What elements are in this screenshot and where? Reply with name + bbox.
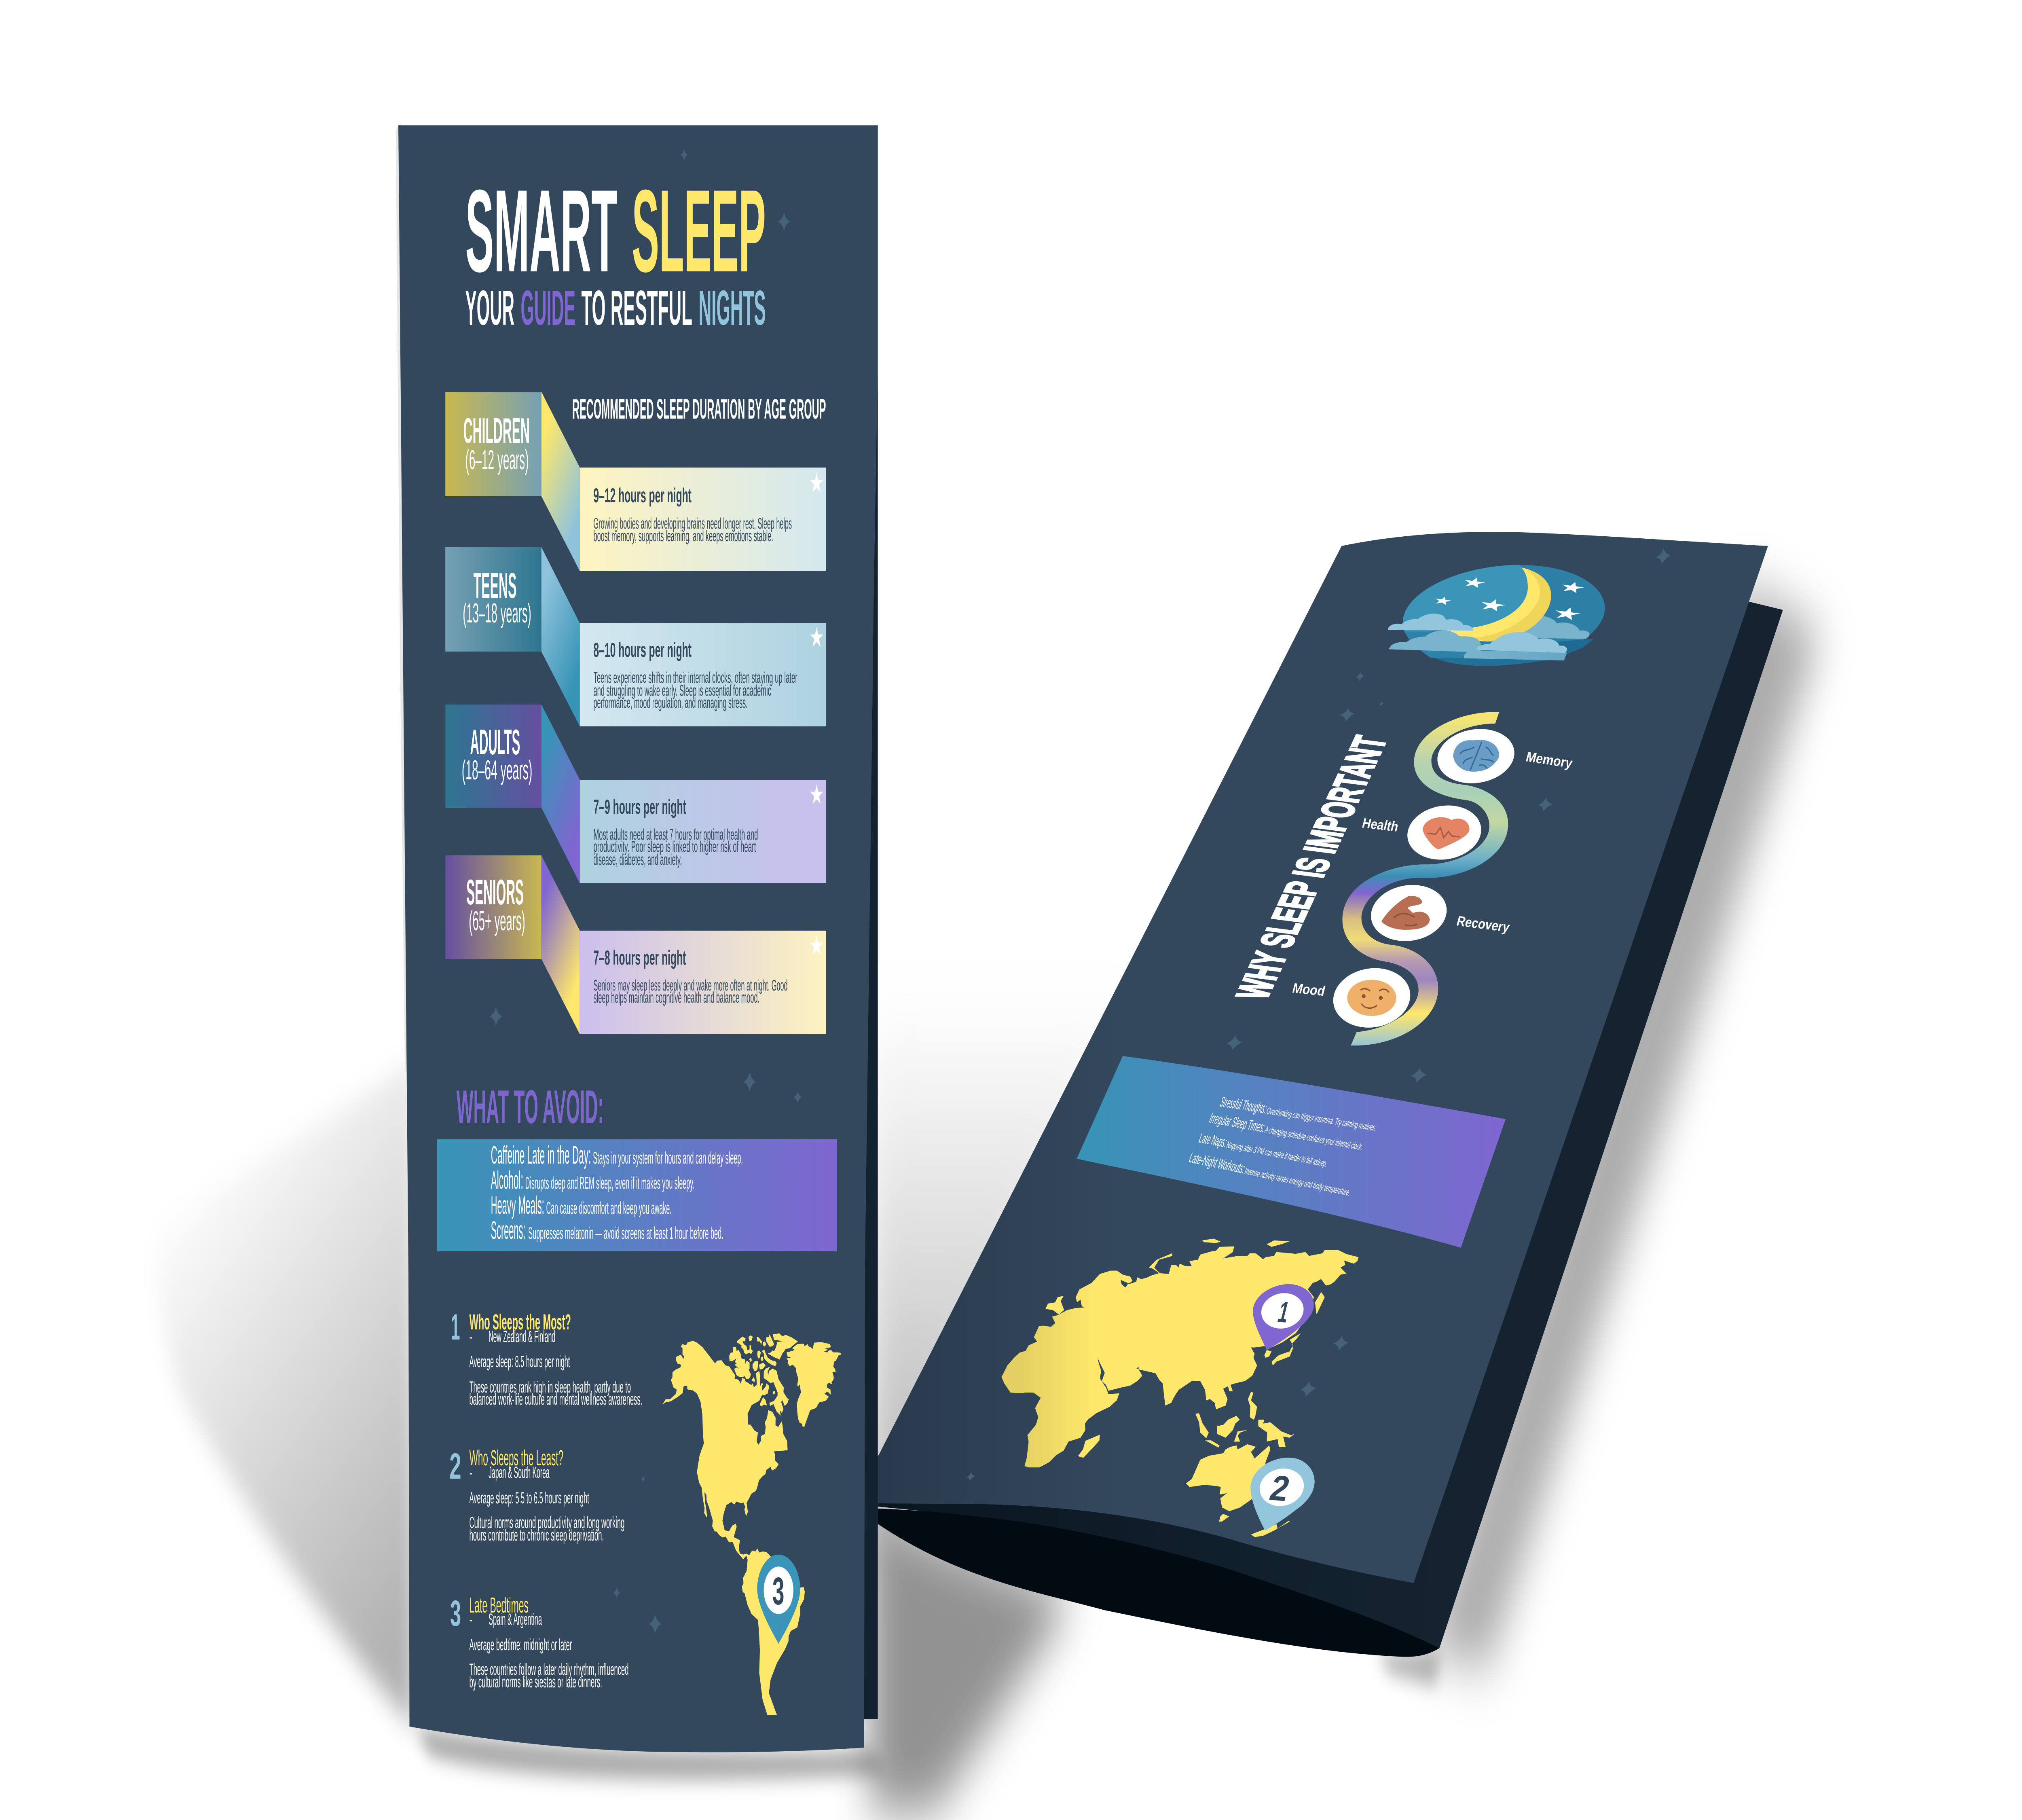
heading: why sleep is important: WHY SLEEP IS IMPORTANT xyxy=(1227,733,1397,1001)
pin number 2: 2 xyxy=(1266,1468,1294,1509)
section 1: who sleeps the most xyxy=(451,1306,642,1409)
age group: children: boost memory, supports learning, and keeps emotions stable. xyxy=(594,527,773,544)
pin 3 xyxy=(757,1555,800,1644)
subtitle: YOUR xyxy=(465,280,514,335)
panel: what to avoid list: Alcohol: xyxy=(491,1166,523,1194)
line: irregular sleep times: Irregular Sleep Times: xyxy=(1207,1110,1268,1135)
age group: children: 9–12 hours per night xyxy=(594,484,692,507)
section 3: late bedtimes xyxy=(450,1593,628,1691)
back panel: why sleep is important xyxy=(878,532,1768,1583)
subtitle xyxy=(465,280,766,335)
line: stressful thoughts xyxy=(1218,1094,1380,1134)
subtitle: NIGHTS xyxy=(699,280,766,335)
section 2: who sleeps the least: hours contribute to chronic sleep deprivation. xyxy=(470,1526,604,1545)
section 3: late bedtimes: 3 xyxy=(450,1593,461,1634)
line: irregular sleep times xyxy=(1207,1110,1366,1153)
age group: adults: (18–64 years) xyxy=(462,755,532,786)
section 1: who sleeps the most: These countries rank high in sleep health, partly due to xyxy=(470,1378,631,1397)
icon: brain xyxy=(1434,724,1518,788)
age group: teens: (13–18 years) xyxy=(463,598,531,629)
age group: teens: 8–10 hours per night xyxy=(594,638,692,661)
panel: what to avoid list xyxy=(437,1139,837,1251)
drop shadows on the surface xyxy=(156,582,1822,1812)
age group: adults: Most adults need at least 7 hours for optimal health and xyxy=(594,825,758,843)
section 3: late bedtimes: Late Bedtimes xyxy=(470,1593,529,1617)
panel: what to avoid list: Disrupts deep and REM sleep, even if it makes you sleepy. xyxy=(525,1174,695,1193)
age group: adults: disease, diabetes, and anxiety. xyxy=(594,851,682,868)
line: late-night workouts xyxy=(1187,1150,1354,1199)
section 1: who sleeps the most: 1 xyxy=(451,1306,460,1347)
panel: what to avoid list: Screens: xyxy=(491,1216,525,1244)
age group: teens: Teens experience shifts in their internal clocks, often staying up later xyxy=(594,669,797,686)
pin 1 xyxy=(1253,1284,1314,1350)
age group: adults: 7–9 hours per night xyxy=(594,795,686,818)
line: stressful thoughts: Stressful Thoughts: xyxy=(1218,1094,1269,1116)
age group: adults: productivity. Poor sleep is linked to higher risk of heart xyxy=(594,838,756,855)
panel: what to avoid list: Caffeine Late in the Day: xyxy=(491,1141,591,1169)
line: late naps: Late Naps: xyxy=(1197,1130,1229,1150)
age group: children xyxy=(445,392,826,571)
front panel xyxy=(396,125,878,1752)
age group: seniors: SENIORS xyxy=(466,872,524,912)
panel: sleep disruptors gradient box xyxy=(1077,1056,1506,1248)
section 1: who sleeps the most: New Zealand & Finland xyxy=(489,1328,555,1346)
icon: moon, stars and clouds xyxy=(1388,565,1605,666)
section 1: who sleeps the most: Who Sleeps the Most? xyxy=(470,1310,571,1334)
subtitle: TO RESTFUL xyxy=(582,280,692,335)
age group: children: CHILDREN xyxy=(463,411,530,451)
section 3: late bedtimes: by cultural norms like siestas or late dinners. xyxy=(470,1673,602,1691)
title: SLEEP xyxy=(632,166,766,296)
section 2: who sleeps the least: Who Sleeps the Least? xyxy=(470,1445,563,1470)
section 2: who sleeps the least: - xyxy=(470,1464,473,1481)
pin number 3: 3 xyxy=(772,1570,784,1613)
world map: Eurasia, Africa, Australia xyxy=(1002,1239,1359,1537)
title: SMART xyxy=(465,166,618,296)
age group: seniors: 7–8 hours per night xyxy=(594,946,686,969)
panel: what to avoid list: Suppresses melatonin — avoid screens at least 1 hour before bed. xyxy=(528,1224,723,1243)
section 1: who sleeps the most: balanced work-life culture and mental wellness awareness. xyxy=(470,1390,642,1409)
section 3: late bedtimes: Spain & Argentina xyxy=(489,1610,542,1629)
front page: dark back sheet edge xyxy=(854,125,878,1719)
pin 2 xyxy=(1250,1458,1315,1530)
age group: seniors: sleep helps maintain cognitive health and balance mood. xyxy=(594,988,759,1006)
subtitle: GUIDE xyxy=(521,280,575,335)
benefit label: Mood: Mood xyxy=(1291,981,1327,999)
age group: children: Growing bodies and developing brains need longer rest. Sleep helps xyxy=(594,514,792,532)
benefit label: Memory: Memory xyxy=(1524,749,1574,771)
line: irregular sleep times: A changing schedule confuses your internal clock. xyxy=(1263,1125,1364,1152)
age group: adults: ADULTS xyxy=(470,722,520,762)
line: late-night workouts: Intense activity raises energy and body temperature. xyxy=(1243,1166,1352,1198)
icon: smiling face xyxy=(1330,963,1414,1033)
S-curve ribbon with benefit icons xyxy=(1330,712,1518,1048)
age group: seniors: Seniors may sleep less deeply and wake more often at night. Good xyxy=(594,976,787,994)
section 2: who sleeps the least: 2 xyxy=(449,1445,461,1486)
benefit label: Health: Health xyxy=(1360,816,1400,835)
age group: seniors xyxy=(445,855,826,1034)
section 2: who sleeps the least xyxy=(449,1445,624,1545)
age group: adults xyxy=(445,705,826,883)
pin number 1: 1 xyxy=(1275,1296,1292,1329)
line: late naps xyxy=(1197,1130,1331,1170)
section 3: late bedtimes: - xyxy=(470,1610,473,1628)
panel: what to avoid list: Stays in your system for hours and can delay sleep. xyxy=(593,1149,743,1168)
section 2: who sleeps the least: Average sleep: 5.5 to 6.5 hours per night xyxy=(470,1489,589,1507)
age group: children: (6–12 years) xyxy=(465,445,529,476)
line: late-night workouts: Late-Night Workouts: xyxy=(1187,1150,1248,1177)
section 2: who sleeps the least: Japan & South Korea xyxy=(489,1464,550,1482)
heading: recommended sleep duration: RECOMMENDED SLEEP DURATION BY AGE GROUP xyxy=(572,394,826,425)
section 1: who sleeps the most: Average sleep: 8.5 hours per night xyxy=(470,1353,570,1371)
age group: seniors: (65+ years) xyxy=(469,906,525,937)
benefit label: Recovery: Recovery xyxy=(1455,914,1511,935)
age group: teens: TEENS xyxy=(474,566,516,605)
section 1: who sleeps the most: - xyxy=(470,1328,473,1345)
section 2: who sleeps the least: Cultural norms around productivity and long working xyxy=(470,1514,624,1532)
age group: teens xyxy=(445,547,826,726)
age group: teens: and struggling to wake early. Sleep is essential for academic xyxy=(594,681,771,699)
panel: what to avoid list: Can cause discomfort and keep you awake. xyxy=(546,1199,672,1218)
icon: heart xyxy=(1404,801,1485,864)
sparkles on back panel xyxy=(967,548,1671,1481)
sparkles on front panel xyxy=(490,149,802,1634)
line: late naps: Napping after 3 PM can make it harder to fall asleep. xyxy=(1225,1140,1329,1169)
icon: muscle arm xyxy=(1367,880,1450,946)
section 3: late bedtimes: These countries follow a later daily rhythm, influenced xyxy=(470,1661,628,1679)
section 3: late bedtimes: Average bedtime: midnight or later xyxy=(470,1636,572,1654)
map: the Americas xyxy=(662,1333,841,1715)
back page: dark inner flap xyxy=(878,602,1783,1657)
heading: what to avoid: WHAT TO AVOID: xyxy=(457,1080,604,1133)
line: stressful thoughts: Overthinking can trigger insomnia. Try calming routines. xyxy=(1265,1106,1378,1133)
panel: what to avoid list: Heavy Meals: xyxy=(491,1191,544,1219)
age group: teens: performance, mood regulation, and managing stress. xyxy=(594,694,748,711)
